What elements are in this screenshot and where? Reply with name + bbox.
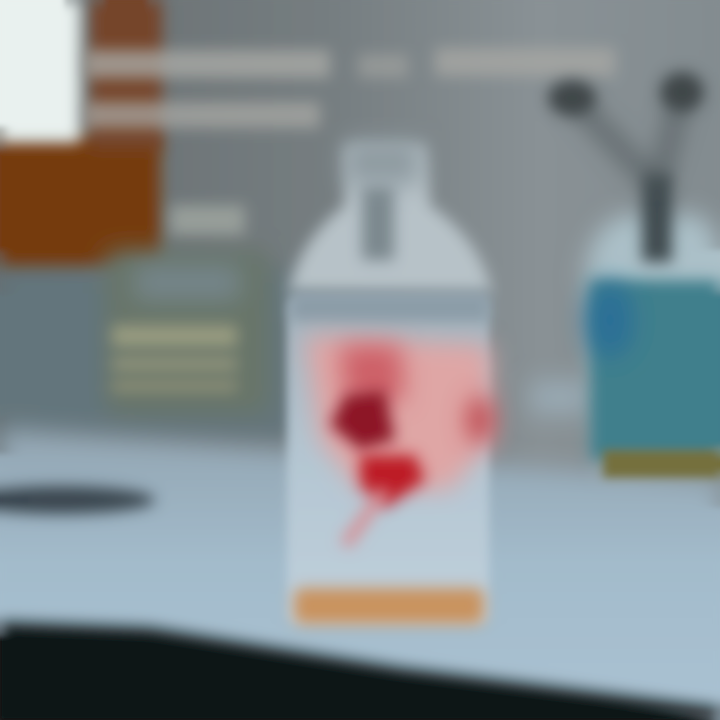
teal background bottle with stems, right [548,72,720,478]
red dye core [330,390,395,450]
main bottle [287,140,493,625]
bottle body [287,295,489,625]
bottle collar band [290,292,490,322]
window and brown frame [0,0,162,265]
bottle shoulder and neck [288,145,492,292]
pink dye cloud [305,335,492,490]
title placeholder: illegible blurred text [85,48,615,128]
background bottle with label, left [105,205,270,415]
sediment at bottle base [294,588,484,624]
table surface [0,380,720,720]
